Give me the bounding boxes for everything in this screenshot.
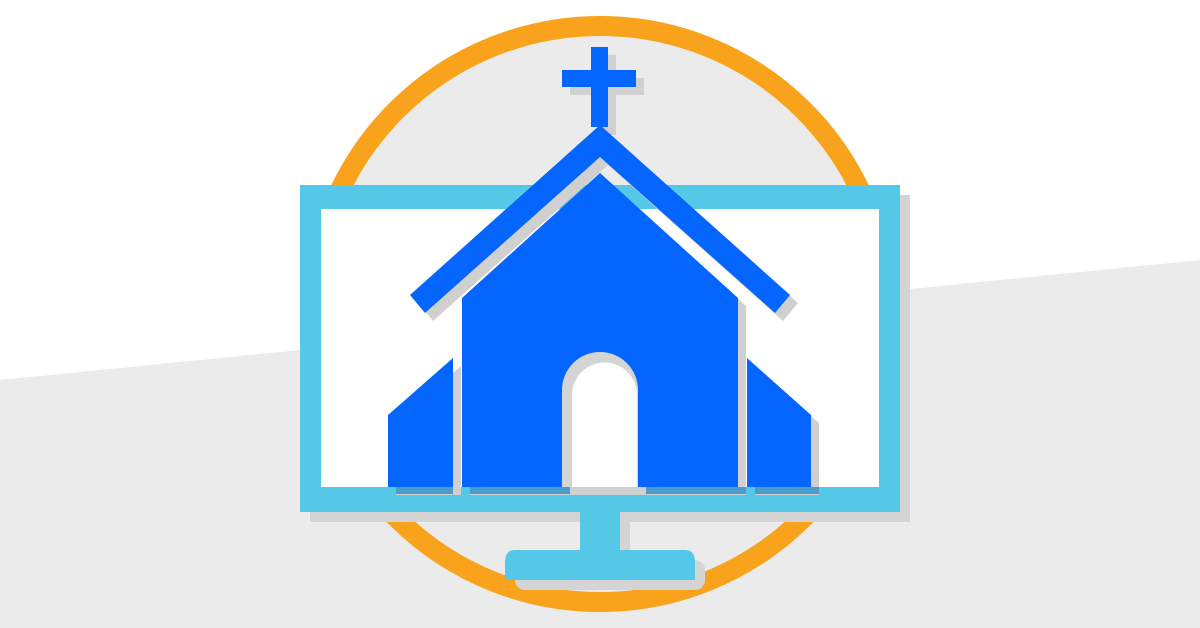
orange circle	[312, 26, 888, 602]
icon: church	[388, 47, 819, 495]
background band	[0, 260, 1200, 628]
monitor	[300, 185, 910, 590]
